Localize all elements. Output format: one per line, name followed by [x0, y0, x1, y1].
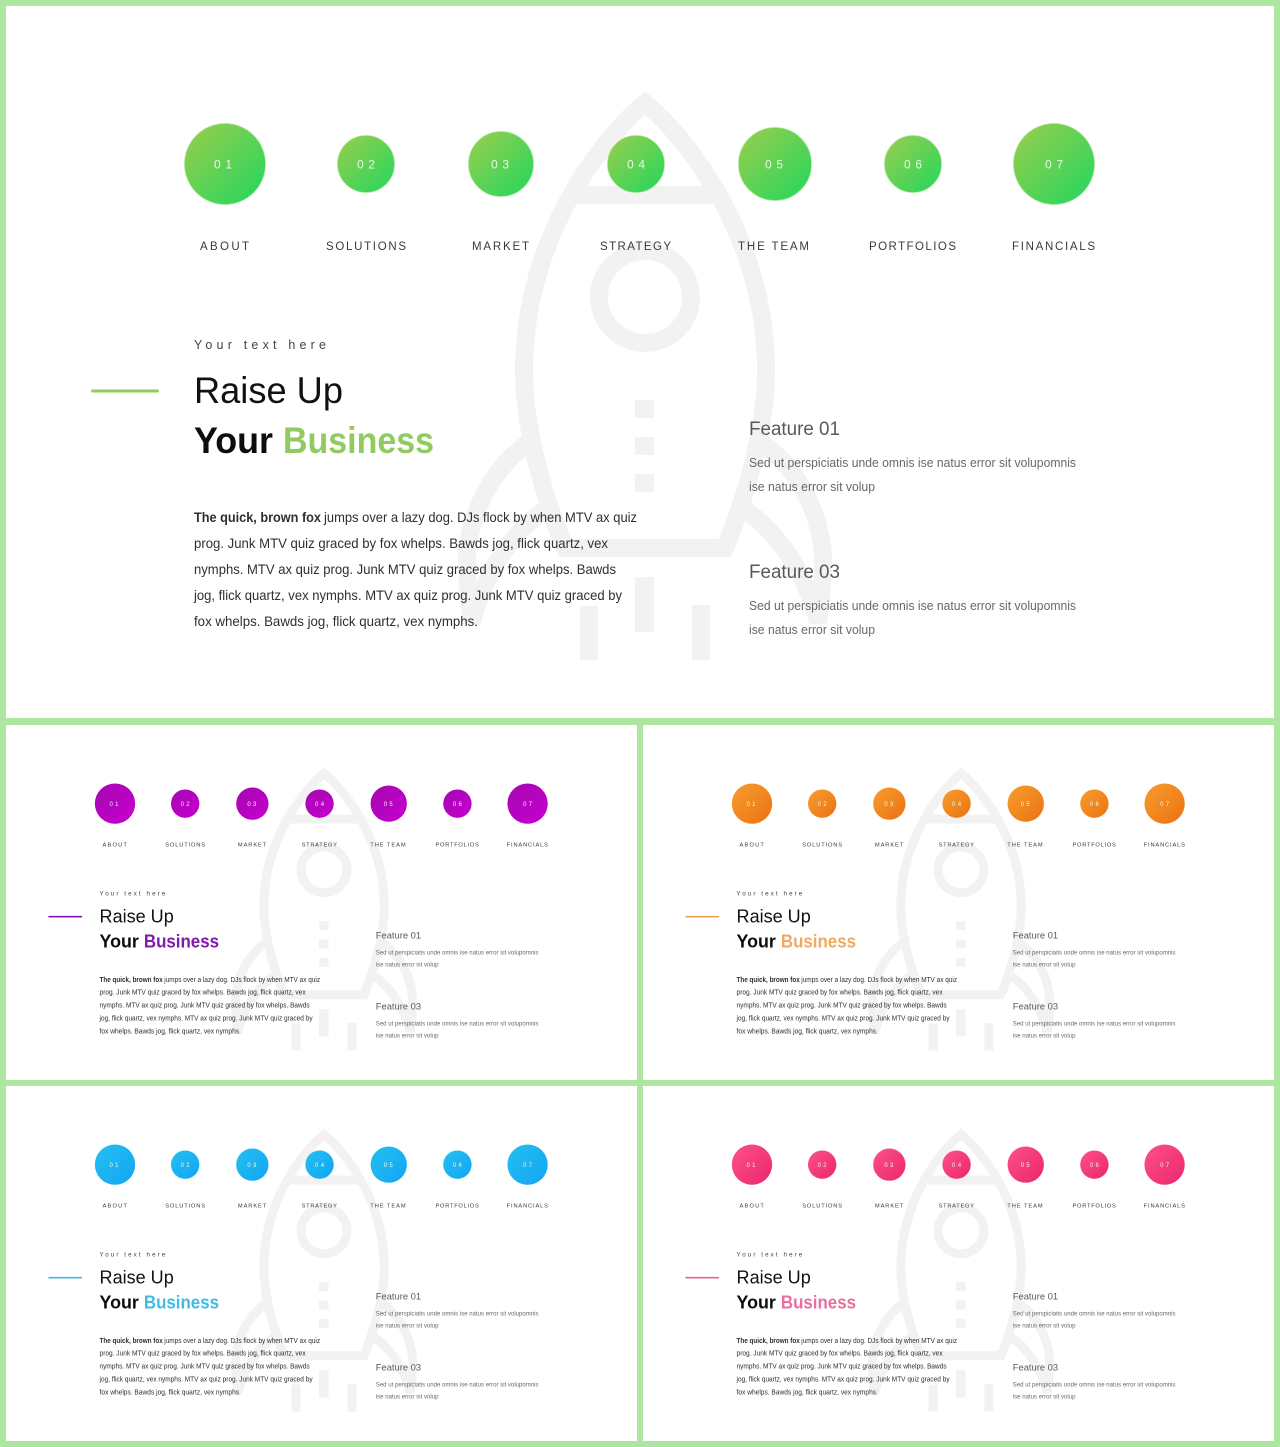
body text: The quick, brown fox — [737, 1338, 800, 1345]
title: Business — [144, 1291, 219, 1312]
accent line — [685, 916, 719, 918]
body text — [736, 977, 958, 1036]
title — [100, 1267, 219, 1312]
body text — [193, 509, 637, 629]
title: Raise Up — [737, 906, 811, 927]
step labels: ABOUT — [103, 1203, 127, 1209]
body text: fox whelps. Bawds jog, flick quartz, vex nymphs. — [100, 1029, 241, 1036]
feature 03 — [1013, 1363, 1176, 1401]
panel: blue slide — [6, 1086, 637, 1441]
step numbers: 01 — [747, 1163, 756, 1169]
feature 03: Feature 03 — [1013, 1363, 1058, 1374]
step labels: ABOUT — [740, 1203, 764, 1209]
body text: jumps over a lazy dog. DJs flock by when MTV ax quiz — [800, 977, 958, 984]
step labels — [200, 241, 1095, 253]
body text: prog. Junk MTV quiz graced by fox whelps. Bawds jog, flick quartz, vex — [737, 990, 943, 997]
feature 01 — [1013, 931, 1176, 968]
feature 03: Sed ut perspiciatis unde omnis ise natus error sit volupomnis — [1013, 1382, 1176, 1389]
body text: fox whelps. Bawds jog, flick quartz, vex nymphs. — [100, 1390, 241, 1397]
step labels: STRATEGY — [600, 241, 671, 253]
step numbers: 01 — [110, 802, 119, 808]
body text: jumps over a lazy dog. DJs flock by when MTV ax quiz — [163, 977, 321, 984]
step labels: THE TEAM — [1007, 1203, 1043, 1209]
step circles — [184, 124, 1094, 204]
title: Business — [144, 930, 219, 951]
panel: orange slide — [643, 725, 1274, 1080]
step labels: ABOUT — [103, 842, 127, 848]
body text: The quick, brown fox — [100, 1338, 163, 1345]
feature 03 — [376, 1002, 539, 1040]
step numbers: 06 — [453, 1163, 463, 1169]
step circles — [95, 1144, 548, 1185]
step numbers — [110, 1163, 533, 1169]
step numbers: 02 — [818, 802, 827, 808]
step numbers: 04 — [315, 802, 325, 808]
step numbers: 05 — [384, 1163, 393, 1169]
step labels: SOLUTIONS — [326, 241, 406, 253]
body text: fox whelps. Bawds jog, flick quartz, vex nymphs. — [737, 1390, 878, 1397]
accent line — [685, 1277, 719, 1279]
feature 03 — [749, 562, 1076, 637]
feature 01: Sed ut perspiciatis unde omnis ise natus error sit volupomnis — [376, 1310, 539, 1317]
accent line — [48, 1277, 82, 1279]
feature 01 — [1013, 1292, 1176, 1329]
body text: nymphs. MTV ax quiz prog. Junk MTV quiz graced by fox whelps. Bawds — [100, 1003, 310, 1010]
panel: pink slide — [643, 1086, 1274, 1441]
body text: prog. Junk MTV quiz graced by fox whelps. Bawds jog, flick quartz, vex — [194, 535, 608, 551]
feature 03 — [1013, 1002, 1176, 1040]
step numbers: 05 — [1021, 1163, 1030, 1169]
step labels: PORTFOLIOS — [436, 842, 479, 848]
step numbers: 07 — [1160, 802, 1170, 808]
body text: jog, flick quartz, vex nymphs. MTV ax quiz prog. Junk MTV quiz graced by — [99, 1016, 313, 1023]
body text — [99, 977, 321, 1036]
step labels: MARKET — [238, 1203, 267, 1209]
body text: jog, flick quartz, vex nymphs. MTV ax quiz prog. Junk MTV quiz graced by — [99, 1377, 313, 1384]
step labels: SOLUTIONS — [165, 842, 205, 848]
feature 01: Feature 01 — [376, 1292, 421, 1303]
step numbers: 07 — [1160, 1163, 1170, 1169]
step labels: PORTFOLIOS — [869, 241, 956, 253]
feature 01: Sed ut perspiciatis unde omnis ise natus error sit volupomnis — [1013, 1310, 1176, 1317]
step labels: PORTFOLIOS — [1073, 1203, 1116, 1209]
step circles — [732, 1144, 1185, 1185]
feature 03: ise natus error sit volup — [376, 1394, 439, 1401]
step numbers: 04 — [627, 158, 645, 172]
icon: rocket watermark — [467, 103, 823, 660]
step labels: FINANCIALS — [507, 1203, 548, 1209]
feature 03: Sed ut perspiciatis unde omnis ise natus error sit volupomnis — [376, 1021, 539, 1028]
step numbers: 03 — [247, 802, 257, 808]
title: Your — [194, 420, 273, 461]
step numbers: 04 — [952, 1163, 962, 1169]
step labels: STRATEGY — [939, 842, 974, 848]
step numbers: 03 — [247, 1163, 257, 1169]
step circles — [732, 783, 1185, 824]
title — [194, 370, 434, 461]
step numbers: 04 — [315, 1163, 325, 1169]
kicker: Your text here — [737, 891, 803, 898]
step numbers: 06 — [453, 802, 463, 808]
step labels: THE TEAM — [738, 241, 809, 253]
step numbers: 02 — [818, 1163, 827, 1169]
step numbers: 01 — [110, 1163, 119, 1169]
title: Raise Up — [100, 906, 174, 927]
step labels: FINANCIALS — [1144, 842, 1185, 848]
step labels: STRATEGY — [939, 1203, 974, 1209]
feature 01 — [376, 1292, 539, 1329]
title — [100, 906, 219, 951]
body text: prog. Junk MTV quiz graced by fox whelps. Bawds jog, flick quartz, vex — [100, 1351, 306, 1358]
title: Your — [737, 930, 776, 951]
feature 01: ise natus error sit volup — [376, 1322, 439, 1329]
step labels: MARKET — [238, 842, 267, 848]
step labels: THE TEAM — [370, 842, 406, 848]
body text: jog, flick quartz, vex nymphs. MTV ax quiz prog. Junk MTV quiz graced by — [736, 1016, 950, 1023]
kicker: Your text here — [100, 1252, 166, 1259]
title: Your — [737, 1291, 776, 1312]
step numbers — [214, 158, 1063, 172]
feature 01 — [749, 419, 1076, 494]
step labels — [103, 842, 548, 848]
feature 01: Feature 01 — [1013, 1292, 1058, 1303]
step numbers: 04 — [952, 802, 962, 808]
feature 01 — [376, 931, 539, 968]
step labels: THE TEAM — [370, 1203, 406, 1209]
step labels: FINANCIALS — [1144, 1203, 1185, 1209]
body text: The quick, brown fox — [100, 977, 163, 984]
icon: rocket watermark — [235, 773, 413, 1050]
step numbers: 06 — [904, 158, 922, 172]
body text: The quick, brown fox — [737, 977, 800, 984]
body text: nymphs. MTV ax quiz prog. Junk MTV quiz graced by fox whelps. Bawds — [737, 1364, 947, 1371]
step numbers: 01 — [214, 158, 232, 172]
body text: jumps over a lazy dog. DJs flock by when MTV ax quiz — [163, 1338, 321, 1345]
title: Raise Up — [737, 1267, 811, 1288]
step labels: FINANCIALS — [507, 842, 548, 848]
feature 03: Sed ut perspiciatis unde omnis ise natus error sit volupomnis — [1013, 1021, 1176, 1028]
feature 03: ise natus error sit volup — [749, 623, 875, 637]
step numbers: 06 — [1090, 1163, 1100, 1169]
feature 01: Sed ut perspiciatis unde omnis ise natus error sit volupomnis — [749, 456, 1076, 470]
panel: green main slide — [6, 6, 1274, 718]
feature 03: Feature 03 — [749, 562, 840, 583]
step labels: MARKET — [875, 1203, 904, 1209]
step labels: MARKET — [472, 241, 529, 253]
feature 03: Feature 03 — [1013, 1002, 1058, 1013]
title: Business — [283, 420, 434, 461]
step numbers: 05 — [384, 802, 393, 808]
step labels: MARKET — [875, 842, 904, 848]
title: Your — [100, 1291, 139, 1312]
step labels — [740, 1203, 1185, 1209]
body text: jog, flick quartz, vex nymphs. MTV ax quiz prog. Junk MTV quiz graced by — [736, 1377, 950, 1384]
step numbers: 03 — [884, 1163, 894, 1169]
icon: rocket watermark — [872, 773, 1050, 1050]
step numbers: 05 — [1021, 802, 1030, 808]
body text: jog, flick quartz, vex nymphs. MTV ax quiz prog. Junk MTV quiz graced by — [193, 587, 622, 603]
step labels: PORTFOLIOS — [436, 1203, 479, 1209]
title: Business — [781, 1291, 856, 1312]
feature 03: ise natus error sit volup — [1013, 1394, 1076, 1401]
icon: rocket watermark — [235, 1134, 413, 1411]
step numbers — [110, 802, 533, 808]
step labels: SOLUTIONS — [802, 842, 842, 848]
panel: purple slide — [6, 725, 637, 1080]
kicker: Your text here — [194, 338, 326, 352]
feature 01: Feature 01 — [376, 931, 421, 942]
feature 03: ise natus error sit volup — [1013, 1033, 1076, 1040]
step numbers: 03 — [884, 802, 894, 808]
kicker: Your text here — [100, 891, 166, 898]
feature 03 — [376, 1363, 539, 1401]
feature 01: ise natus error sit volup — [1013, 1322, 1076, 1329]
title: Your — [100, 930, 139, 951]
icon: rocket watermark — [872, 1134, 1050, 1411]
title: Business — [781, 930, 856, 951]
feature 01: ise natus error sit volup — [376, 961, 439, 968]
feature 03: ise natus error sit volup — [376, 1033, 439, 1040]
step numbers: 02 — [181, 802, 190, 808]
body text: nymphs. MTV ax quiz prog. Junk MTV quiz graced by fox whelps. Bawds — [737, 1003, 947, 1010]
step numbers: 07 — [523, 1163, 533, 1169]
body text: The quick, brown fox — [194, 509, 321, 525]
step numbers: 07 — [523, 802, 533, 808]
body text: fox whelps. Bawds jog, flick quartz, vex nymphs. — [194, 613, 478, 629]
title — [737, 906, 856, 951]
title — [737, 1267, 856, 1312]
kicker: Your text here — [737, 1252, 803, 1259]
body text: nymphs. MTV ax quiz prog. Junk MTV quiz graced by fox whelps. Bawds — [194, 561, 616, 577]
accent line — [91, 390, 159, 392]
feature 03: Sed ut perspiciatis unde omnis ise natus error sit volupomnis — [376, 1382, 539, 1389]
body text: jumps over a lazy dog. DJs flock by when MTV ax quiz — [800, 1338, 958, 1345]
title: Raise Up — [194, 370, 343, 411]
step numbers: 06 — [1090, 802, 1100, 808]
feature 01: Sed ut perspiciatis unde omnis ise natus error sit volupomnis — [1013, 949, 1176, 956]
step labels: PORTFOLIOS — [1073, 842, 1116, 848]
step numbers: 02 — [181, 1163, 190, 1169]
feature 01: ise natus error sit volup — [1013, 961, 1076, 968]
step numbers — [747, 802, 1170, 808]
step labels: FINANCIALS — [1012, 241, 1095, 253]
body text: nymphs. MTV ax quiz prog. Junk MTV quiz graced by fox whelps. Bawds — [100, 1364, 310, 1371]
body text — [99, 1338, 321, 1397]
step labels: STRATEGY — [302, 1203, 337, 1209]
body text: jumps over a lazy dog. DJs flock by when MTV ax quiz — [323, 509, 637, 525]
step numbers — [747, 1163, 1170, 1169]
step labels: ABOUT — [740, 842, 764, 848]
step numbers: 02 — [357, 158, 375, 172]
body text: prog. Junk MTV quiz graced by fox whelps. Bawds jog, flick quartz, vex — [100, 990, 306, 997]
feature 03: Feature 03 — [376, 1002, 421, 1013]
step labels — [740, 842, 1185, 848]
step labels: THE TEAM — [1007, 842, 1043, 848]
body text: prog. Junk MTV quiz graced by fox whelps. Bawds jog, flick quartz, vex — [737, 1351, 943, 1358]
body text: fox whelps. Bawds jog, flick quartz, vex nymphs. — [737, 1029, 878, 1036]
feature 01: Feature 01 — [1013, 931, 1058, 942]
step numbers: 07 — [1045, 158, 1063, 172]
step labels: STRATEGY — [302, 842, 337, 848]
feature 01: ise natus error sit volup — [749, 480, 875, 494]
body text — [736, 1338, 958, 1397]
step numbers: 01 — [747, 802, 756, 808]
step labels — [103, 1203, 548, 1209]
title: Raise Up — [100, 1267, 174, 1288]
step labels: ABOUT — [200, 241, 249, 253]
feature 03: Feature 03 — [376, 1363, 421, 1374]
step labels: SOLUTIONS — [165, 1203, 205, 1209]
step numbers: 03 — [491, 158, 509, 172]
step circles — [95, 783, 548, 824]
feature 03: Sed ut perspiciatis unde omnis ise natus error sit volupomnis — [749, 599, 1076, 613]
accent line — [48, 916, 82, 918]
feature 01: Feature 01 — [749, 419, 840, 440]
feature 01: Sed ut perspiciatis unde omnis ise natus error sit volupomnis — [376, 949, 539, 956]
step numbers: 05 — [765, 158, 783, 172]
step labels: SOLUTIONS — [802, 1203, 842, 1209]
